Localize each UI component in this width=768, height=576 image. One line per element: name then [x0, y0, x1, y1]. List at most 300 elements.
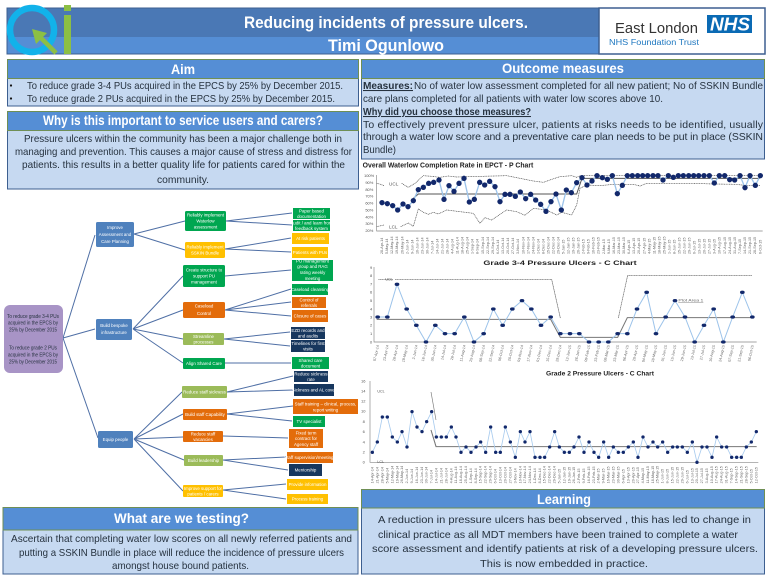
date axis labels: 9-Mar-15 [602, 468, 606, 483]
idea: at risk: At risk patients [296, 236, 326, 241]
driver: leadership: Build leadership [188, 458, 220, 463]
date axis labels: 29-Jun-15 [680, 467, 684, 483]
y axis labels: 20% [365, 228, 374, 233]
driver: structure: support PU [193, 274, 215, 278]
panel: what are we testing [3, 508, 358, 574]
idea: patients with PUs: Patients with PUs [293, 250, 328, 255]
driver: sickness [182, 386, 227, 398]
idea: mentorship: Mentorship [295, 468, 317, 472]
primary driver: equip people: Equip people [103, 437, 129, 442]
idea: AL cover [292, 384, 337, 396]
idea: shared care document: Shared care [299, 358, 323, 363]
driver: shared care [183, 358, 225, 369]
idea: referrals: Control of [299, 298, 319, 302]
aim bullet list: To reduce grade 3-4 PUs acquired in the EPCS by 25% by December 2015. [27, 80, 343, 92]
date axis labels: 8-Jun-15 [672, 240, 676, 254]
date axis labels: 22-Dec-14 [548, 466, 552, 483]
driver: SSKIN [185, 242, 225, 258]
y axis labels: 0 [363, 460, 366, 465]
control limits: LCL [377, 460, 384, 464]
date axis labels: 27-Oct-14 [508, 467, 512, 483]
date axis labels: 16-Mar-15 [612, 237, 616, 254]
idea: staff training: report writing [313, 408, 339, 412]
date axis labels: 27-Jul-15 [708, 239, 712, 254]
date axis labels: 6-Apr-15 [621, 469, 625, 483]
date axis labels: 15-Jun-15 [677, 238, 681, 254]
UCL line [378, 275, 752, 318]
date axis labels: 22-Jun-15 [683, 238, 687, 254]
date axis labels: 10-Nov-14 [521, 237, 525, 254]
driver: vacancies: Reduce staff [191, 432, 216, 436]
date axis labels: 22-Jun-15 [675, 467, 679, 483]
date axis labels: 22-Dec-14 [551, 237, 555, 254]
logo: East London NHS Foundation Trust: NHS [710, 14, 750, 34]
root node: aims: To reduce grade 3-4 PUs [7, 314, 59, 320]
idea: management group: PU management [296, 258, 330, 264]
date axis labels: 03-Nov-14 [517, 345, 524, 362]
driver: structure: Create structure to [186, 268, 223, 272]
date axis labels: 12-Jan-15 [562, 467, 566, 483]
date axis labels: 20-Apr-15 [637, 238, 641, 254]
idea: training: Process training [292, 496, 324, 502]
idea: closure: Closure of cases [294, 314, 327, 318]
secondary drivers [182, 211, 227, 497]
y axis labels: 90% [365, 180, 374, 185]
icon: QI logo [10, 5, 71, 54]
date axis labels: 8-Sep-14 [474, 468, 478, 483]
testing body text: amongst house bound patients. [112, 560, 249, 572]
date axis labels: 28-Sep-15 [744, 466, 748, 483]
date axis labels: 10-Aug-15 [709, 345, 716, 362]
driver: sickness: Reduce staff sickness [183, 390, 227, 394]
date axis labels: 13-Apr-15 [626, 467, 630, 483]
date axis labels: 23-Mar-15 [613, 345, 620, 362]
date axis labels: 28-Apr-14 [380, 238, 384, 254]
date axis labels: 7-Jul-14 [430, 241, 434, 254]
date axis labels: 1-Sep-14 [471, 239, 475, 254]
date axis labels: 11-Aug-14 [454, 467, 458, 483]
date axis labels: 5-Oct-15 [749, 469, 753, 483]
date axis labels: 20-Oct-14 [506, 238, 510, 254]
date axis labels: 29-Dec-14 [556, 237, 560, 254]
idea: AL cover: Sickness and AL cover [292, 388, 337, 392]
driver: streamline: Streamline [193, 334, 215, 339]
idea: closure [292, 310, 328, 322]
date axis labels: 6-Jul-15 [693, 241, 697, 254]
measures text: through a water low score and a preventative care plan needs to be put in place (SSKIN [363, 131, 763, 143]
idea: audit: feedback system [295, 226, 328, 231]
learning body text [372, 514, 758, 570]
date axis labels: 7-Sep-15 [730, 468, 734, 483]
idea: shared care document [292, 357, 329, 369]
date axis labels: 30-Mar-15 [616, 466, 620, 483]
date axis labels: 7-Sep-15 [738, 239, 742, 254]
control limits: UCL [377, 389, 385, 393]
date axis labels: 27-Jul-15 [699, 345, 706, 360]
date axis labels: 07-Apr-14 [373, 345, 380, 361]
control limits [377, 389, 436, 464]
chart: Overall Waterlow P chart [363, 163, 763, 254]
root node: aims: 25% by December 2015 [9, 360, 57, 366]
heading: why: Why is this important to service users and carers? [43, 112, 323, 128]
chart title: Overall Waterlow Completion Rate in EPCT - P Chart [363, 163, 534, 170]
driver: capability: Build staff Capability [185, 412, 226, 417]
driver diagram [4, 208, 358, 504]
date axis labels: 13-Oct-14 [498, 467, 502, 483]
idea: fixed term contract [289, 429, 323, 448]
date axis labels: 23-Feb-15 [594, 345, 601, 362]
date axis labels: 25-Aug-14 [466, 237, 470, 254]
y axis labels [364, 173, 375, 233]
y axis labels: 6 [363, 429, 366, 434]
driver: waterlow: Waterlow [196, 218, 215, 224]
panel: outcome measures [362, 60, 764, 159]
measures text: care plans completed for all patients with water low scores above 10. [363, 93, 663, 105]
date axis labels: 23-Jun-14 [420, 467, 424, 483]
idea: staff training [293, 399, 358, 414]
driver: waterlow [185, 211, 226, 231]
driver: structure: management [191, 280, 218, 284]
date axis labels: 30-Jun-14 [430, 345, 438, 362]
driver: waterlow: Reliably implement [187, 212, 225, 218]
driver: shared care: Align Shared Care [186, 361, 222, 366]
centre line [431, 430, 757, 447]
date axis labels: 4-Aug-14 [451, 239, 455, 254]
date axis labels: 24-Nov-14 [528, 466, 532, 483]
idea: caseload cleansing [291, 284, 330, 295]
driver: structure [183, 265, 225, 287]
date axis labels: 8-Dec-14 [541, 239, 545, 254]
title: Reducing incidents of pressure ulcers. [244, 13, 528, 32]
date axis labels: 3-Aug-15 [705, 468, 709, 483]
date axis labels: 30-Jun-14 [425, 238, 429, 254]
date axis labels: 21-Sep-15 [748, 237, 752, 254]
date axis labels: 12-Oct-15 [754, 467, 758, 483]
idea: management group: group and RAG [297, 264, 328, 269]
date axis labels: 23-Jun-14 [420, 238, 424, 254]
date axis labels: 06-Oct-14 [498, 345, 505, 361]
date axis labels: 13-Apr-15 [632, 238, 636, 254]
driver: streamline: processes [193, 340, 214, 344]
date axis labels: 9-Mar-15 [607, 239, 611, 254]
date axis labels: 9-Jun-14 [410, 469, 414, 483]
date axis labels: 28-Sep-15 [753, 237, 757, 254]
UCL line: UCL [389, 182, 399, 187]
logo: East London NHS Foundation Trust: NHS Foundation Trust [609, 38, 700, 47]
y axis labels: 16 [361, 378, 366, 383]
date axis labels: 28-Apr-14 [380, 467, 384, 483]
date axis labels: 18-May-15 [657, 237, 661, 254]
date axis labels: 14-Sep-15 [735, 466, 739, 483]
date axis labels: 29-Sep-14 [489, 466, 493, 483]
y axis labels: 5 [370, 298, 373, 303]
date axis labels: 13-Jul-15 [690, 345, 697, 360]
driver: caseload [183, 302, 225, 318]
y axis labels: 8 [370, 273, 373, 278]
date axis labels [373, 345, 755, 363]
date axis labels: 16-Jun-14 [415, 238, 419, 254]
y axis labels: 10 [361, 409, 366, 414]
date axis labels: 2-Mar-15 [602, 239, 606, 254]
date axis labels: 1-Dec-14 [536, 239, 540, 254]
date axis labels: 4-May-15 [641, 468, 645, 483]
idea: sickness rate: Reduce sickness [294, 372, 328, 376]
date axis labels: 22-Sep-14 [484, 466, 488, 483]
date axis labels: 5-May-14 [385, 239, 389, 254]
date axis labels: 14-Apr-14 [370, 467, 374, 483]
driver: waterlow: assessment [194, 224, 218, 230]
testing body text: Ascertain that completing water low scores on all newly referred patients and [11, 533, 352, 545]
y axis labels: 0 [370, 339, 373, 344]
data series [382, 176, 760, 211]
root node: aims: acquired in the EPCS by [8, 352, 58, 358]
date axis labels: 13-Oct-14 [501, 238, 505, 254]
y axis labels: 50% [365, 207, 374, 212]
date axis labels: 24-Nov-14 [531, 237, 535, 254]
date axis labels: 21-Sep-15 [737, 345, 745, 362]
idea: documentation [293, 208, 330, 219]
date axis labels: 26-May-14 [400, 466, 404, 483]
date axis labels: 14-Jul-14 [435, 239, 439, 254]
date axis labels: 2-Jun-14 [405, 469, 409, 483]
primary driver: assessment [96, 222, 134, 247]
idea: audit: Audit / and learn from [291, 220, 333, 226]
testing body text: putting a SSKIN Bundle in place will reduce the incidence of pressure ulcers [19, 547, 344, 559]
date axis labels: 31-Aug-15 [733, 237, 737, 254]
date axis labels: 12-Jan-15 [567, 238, 571, 254]
date axis labels: 17-Aug-15 [715, 466, 719, 483]
date axis labels: 15-Dec-14 [546, 345, 553, 362]
date axis labels: 6-Apr-15 [627, 240, 631, 254]
date axis labels: 18-Aug-14 [459, 466, 463, 483]
idea: management group [292, 258, 333, 281]
date axis labels: 6-Oct-15 [758, 240, 762, 254]
date axis labels: 8-Dec-14 [538, 468, 542, 483]
date axis labels: 6-Jul-15 [685, 470, 689, 483]
date axis labels: 12-May-14 [390, 237, 394, 254]
date axis labels: 17-Nov-14 [523, 466, 527, 483]
why body text [15, 133, 352, 186]
learning body text: clinical practice as all MDT members have been trained to complete a water [378, 529, 739, 541]
date axis labels: 04-May-15 [641, 345, 649, 363]
centre line [377, 318, 752, 337]
date axis labels: 21-Jul-14 [439, 468, 443, 483]
date axis labels: 12-May-14 [390, 466, 394, 483]
date axis labels: 3-Aug-15 [713, 239, 717, 254]
y axis labels: 2 [363, 449, 366, 454]
date axis labels: 18-May-15 [651, 345, 658, 363]
date axis labels: 2-Feb-15 [582, 239, 586, 254]
idea: fixed term contract: Agency staff [294, 442, 319, 447]
idea: supervision: Staff supervision/meetings [284, 455, 337, 460]
y axis labels: 70% [365, 194, 374, 199]
idea: fixed term contract: contract for [295, 436, 318, 441]
date axis labels: 19-May-14 [395, 237, 399, 254]
date axis labels: 21-Sep-15 [739, 466, 743, 483]
date axis labels: 23-Feb-15 [592, 466, 596, 483]
date axis labels: 15-Sep-14 [481, 237, 485, 254]
date axis labels: 28-Jul-14 [444, 468, 448, 483]
date axis labels: 23-Feb-15 [597, 237, 601, 254]
date axis labels: 31-Aug-15 [725, 466, 729, 483]
date axis labels: 9-Feb-15 [582, 468, 586, 483]
idea: timelines: visits [303, 346, 314, 352]
date axis labels: 16-Feb-15 [587, 466, 591, 483]
y axis labels: 4 [370, 306, 373, 311]
date axis labels: 19-Jan-15 [567, 467, 571, 483]
date axis labels: 10-Aug-15 [710, 466, 714, 483]
driver: vacancies [183, 431, 223, 442]
primary driver: infrastructure: Build bespoke [100, 323, 128, 328]
date axis labels: 09-Feb-15 [584, 345, 591, 362]
date axis labels: 21-Jul-14 [441, 239, 445, 254]
date axis labels: 15-Dec-14 [543, 466, 547, 483]
idea: sickness rate [294, 371, 328, 382]
date axis labels: 20-Apr-15 [632, 345, 639, 361]
centre line [413, 178, 760, 198]
annotation: Plot Area 1 [678, 297, 704, 302]
measures text: Measures: [363, 80, 413, 92]
date axis labels: 1-Dec-14 [533, 468, 537, 483]
date axis labels: 24-Aug-15 [728, 237, 732, 254]
idea: records: and audits [298, 334, 319, 338]
date axis labels: 27-Apr-15 [636, 467, 640, 483]
date axis labels: 09-Mar-15 [603, 345, 611, 362]
date axis labels: 19-May-14 [401, 345, 409, 363]
date axis labels: 18-May-15 [651, 466, 655, 483]
date axis labels: 25-May-15 [662, 237, 666, 254]
date axis labels: 07-Sep-15 [728, 345, 735, 362]
idea: documentation: Paper based [299, 208, 325, 214]
chart: Grade 2 C chart [361, 371, 758, 483]
date axis labels: 9-Jun-14 [410, 240, 414, 254]
date axis labels: 13-Jul-15 [698, 239, 702, 254]
y axis labels: 14 [361, 388, 366, 393]
UCL line [377, 176, 760, 187]
aim bullet list: To reduce grade 2 PUs acquired in the EPCS by 25% by December 2015. [27, 93, 335, 105]
date axis labels: 12-Jan-15 [565, 345, 572, 362]
primary driver: assessment: Assessment and [99, 232, 132, 237]
date axis labels: 29-Jun-15 [688, 238, 692, 254]
root node: aims: To reduce grade 2 PUs [9, 346, 57, 352]
date axis labels: 28-Apr-14 [392, 345, 399, 361]
idea: documentation: documentation [297, 214, 326, 219]
idea: information: Provide information [289, 482, 327, 487]
idea: sickness rate: rate [307, 377, 315, 382]
chart title: Grade 3-4 Pressure Ulcers - C Chart [483, 260, 638, 267]
idea: TV specialist [293, 416, 325, 427]
date axis labels: 14-Sep-15 [743, 237, 747, 254]
why body text: Pressure ulcers within the community has been a major challenge both in [24, 133, 342, 145]
date axis labels: 3-Nov-14 [513, 468, 517, 483]
idea: training [287, 494, 328, 504]
date axis labels: 27-Oct-14 [511, 238, 515, 254]
driver: support [183, 485, 223, 497]
date axis labels: 19-May-14 [395, 466, 399, 483]
date axis labels: 10-Nov-14 [518, 466, 522, 483]
primary driver: infrastructure [96, 319, 132, 340]
date axis labels: 10-Aug-15 [718, 237, 722, 254]
title banner [7, 8, 599, 55]
LCL line: LCL [389, 224, 398, 229]
aim bullet list [10, 80, 343, 105]
y axis labels: 60% [365, 201, 374, 206]
date axis labels: 25-Aug-14 [469, 345, 476, 362]
driver: SSKIN: Reliably implement [186, 244, 224, 250]
root node: aims: 25% by December 2015 [9, 328, 57, 334]
learning body text: A reduction in pressure ulcers has been observed , this has led to change in [378, 514, 751, 526]
date axis labels: 5-Jan-15 [562, 240, 566, 254]
driver: capability [183, 409, 227, 420]
y axis labels: 80% [365, 187, 374, 192]
data series [378, 284, 752, 342]
measures text [363, 80, 764, 156]
idea: records: EZD records and [291, 328, 325, 333]
panel: learning [362, 490, 764, 574]
date axis labels: 14-Jul-14 [440, 345, 447, 360]
y axis labels: 6 [370, 290, 373, 295]
y axis labels: 8 [363, 419, 366, 424]
date axis labels: 24-Aug-15 [720, 466, 724, 483]
date axis labels: 1-Jun-15 [661, 469, 665, 483]
date axis labels: 22-Sep-14 [488, 345, 496, 362]
testing body text [11, 533, 352, 572]
driver: caseload: Caseload [195, 304, 214, 308]
date axis labels: 23-Mar-15 [617, 237, 621, 254]
date axis labels: 7-Jul-14 [430, 470, 434, 483]
date axis labels: 29-Sep-14 [491, 237, 495, 254]
date axis labels: 5-May-14 [385, 468, 389, 483]
date axis labels: 5-Jan-15 [557, 469, 561, 483]
idea: mentorship [289, 464, 322, 476]
driver: leadership [184, 455, 223, 466]
date axis labels: 26-Jan-15 [572, 467, 576, 483]
date axis labels: 16-Mar-15 [607, 466, 611, 483]
panel: aim [8, 60, 358, 106]
date axis labels: 11-May-15 [652, 237, 656, 254]
date axis labels: 15-Sep-14 [479, 466, 483, 483]
date axis labels: 24-Aug-15 [718, 345, 726, 362]
heading: outcome measures: Outcome measures [502, 60, 624, 76]
date axis labels: 01-Jun-15 [661, 345, 668, 362]
heading: what are we testing: What are we testing? [114, 510, 249, 526]
root node: aims [4, 305, 63, 373]
y axis labels: 30% [365, 221, 374, 226]
date axis labels: 29-Dec-14 [555, 345, 563, 362]
date axis labels: 22-Sep-14 [486, 237, 490, 254]
idea: supervision [284, 452, 337, 463]
date axis labels: 11-Aug-14 [459, 345, 467, 362]
data series [372, 412, 756, 462]
date axis labels: 17-Aug-15 [723, 237, 727, 254]
y axis labels: 9 [370, 265, 373, 270]
logo: East London NHS Foundation Trust [599, 8, 765, 54]
date axis labels: 3-Nov-14 [516, 239, 520, 254]
date axis labels: 6-Oct-14 [496, 240, 500, 254]
date axis labels: 1-Jun-15 [667, 240, 671, 254]
date axis labels: 06-Apr-15 [622, 345, 630, 361]
chart: Grade 3-4 C chart [370, 260, 757, 363]
date axis labels: 01-Dec-14 [536, 345, 543, 362]
date axis labels: 13-Jul-15 [690, 468, 694, 483]
date axis labels: 11-Aug-14 [456, 237, 460, 254]
panel: why important [8, 112, 358, 189]
measures text: To effectively prevent pressure ulcer, patients at risks needs to be identified, usually [363, 119, 764, 131]
date axis labels: 17-Nov-14 [526, 345, 534, 362]
idea: patients with PUs [292, 247, 328, 258]
date axis labels: 16-Jun-14 [421, 345, 428, 362]
y axis labels: 100% [364, 173, 375, 178]
